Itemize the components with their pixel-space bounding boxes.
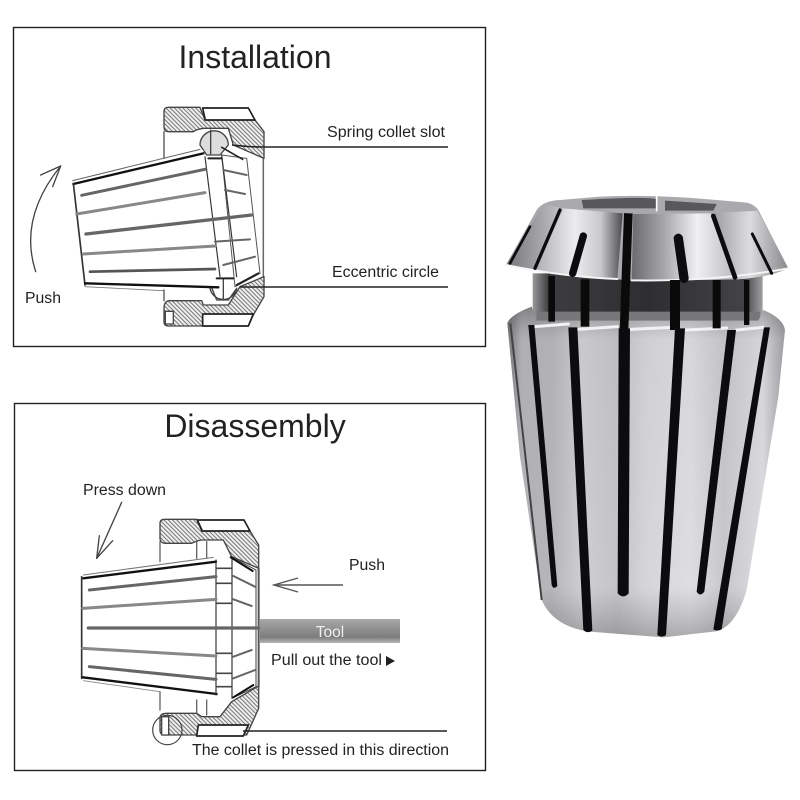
collet body (507, 307, 785, 637)
label: press down: Press down (83, 482, 166, 499)
arrow: push left (274, 578, 343, 592)
top opening (582, 198, 717, 211)
icon: right triangle (386, 656, 395, 666)
leader line: collet pressed direction (243, 730, 447, 732)
label: spring collet slot: Spring collet slot (327, 124, 446, 141)
label: collet press direction: The collet is pressed in this direction (192, 742, 449, 759)
head slots (510, 210, 772, 278)
collet head base (506, 196, 788, 281)
neck slots (552, 213, 747, 330)
heading: disassembly: Disassembly (164, 408, 346, 444)
arrow: press down (97, 502, 122, 558)
label: pull out the tool: Pull out the tool (271, 652, 382, 669)
collet body (82, 557, 259, 698)
leader line: spring collet slot (232, 145, 448, 147)
heading: installation: Installation (179, 39, 331, 75)
label: eccentric circle: Eccentric circle (332, 264, 439, 281)
nut cross-section (153, 519, 259, 745)
collet body (73, 147, 260, 291)
nut cross-section (164, 107, 264, 326)
label: tool: Tool (316, 624, 344, 641)
collet neck (533, 273, 763, 323)
head segments (506, 204, 788, 281)
label: push: Push (349, 557, 385, 574)
label: push: Push (25, 290, 61, 307)
diagram: collet being removed (82, 502, 259, 745)
arrow: push upward (31, 166, 61, 272)
panel: installation (14, 28, 486, 346)
tool bar (260, 619, 400, 643)
diagram: collet inserted into nut (31, 107, 264, 326)
panel: disassembly (14, 404, 486, 770)
photo: ER spring collet (506, 196, 788, 637)
body slots (509, 323, 770, 637)
segment top edges (535, 324, 763, 330)
leader line: eccentric circle (240, 286, 448, 288)
